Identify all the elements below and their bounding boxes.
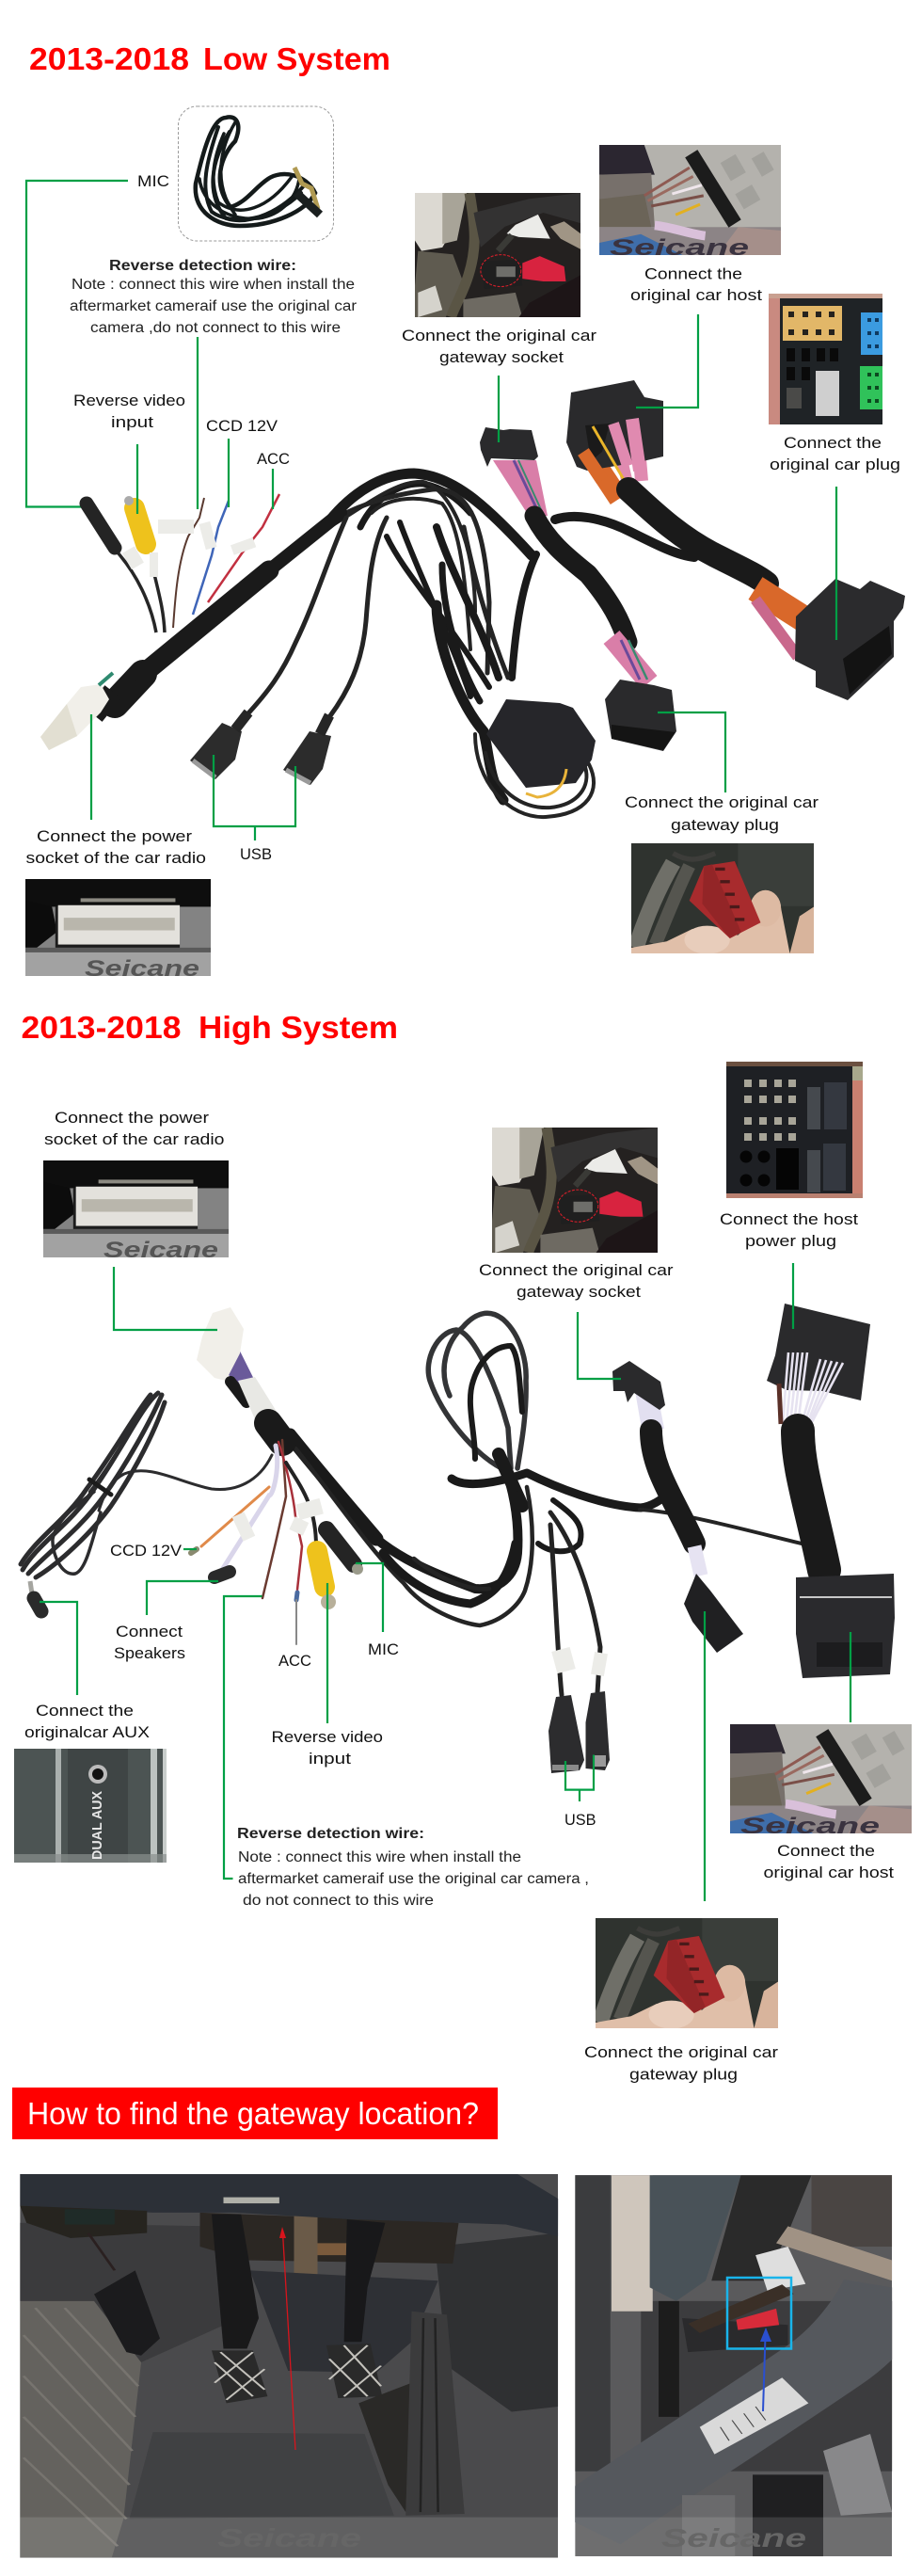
- text block: reverse detection wire note: aftermarket cameraif use the original car: [70, 298, 357, 314]
- heading: 2013-2018 High System: 2013-2018: [21, 1010, 181, 1045]
- label: gateway plug high: Connect the original car: [584, 2043, 778, 2061]
- text block: reverse detection note high: Note : connect this wire when install the: [238, 1849, 521, 1865]
- photo: AUX port: DUAL AUX: [89, 1791, 105, 1860]
- sub: gateway socket connector and wires: [480, 427, 628, 642]
- label: MIC: MIC: [137, 172, 169, 190]
- label: gateway socket: gateway socket: [439, 348, 564, 366]
- arrow: host power leader: [792, 1263, 794, 1329]
- sub: USB connectors: [190, 712, 331, 785]
- label: USB high: USB: [564, 1811, 596, 1829]
- sub: MIC jack: [87, 504, 115, 548]
- sub: label block and sleeve: [230, 1377, 282, 1442]
- heading: 2013-2018 High System: [21, 1010, 398, 1045]
- sub: big bundle to the lower right: [290, 1435, 533, 1625]
- label: ACC high: ACC: [278, 1652, 311, 1670]
- text block: reverse detection note high: aftermarket cameraif use the original car camera ,: [238, 1871, 589, 1887]
- sub: thick sleeve to car plug: [555, 489, 767, 584]
- photo: footwell with pedals: Seicane: [217, 2523, 361, 2552]
- heading: 2013-2018 Low System: Low System: [203, 41, 390, 76]
- arrow: plug leader: [835, 487, 837, 640]
- photo: original car host high: Seicane: [740, 1814, 880, 1839]
- sub: MIC jack: [326, 1529, 363, 1575]
- arrow: gateway plug leader high: [704, 1611, 706, 1901]
- arrow: host leader high: [850, 1632, 851, 1722]
- arrow: USB bracket high: [565, 1754, 594, 1801]
- photo: radio power socket high: Seicane: [103, 1238, 218, 1263]
- sub: wire labels: [122, 520, 256, 577]
- label: original car host high: Connect the: [777, 1842, 875, 1860]
- sub: yellow RCA plug: [317, 1551, 336, 1609]
- photo: radio power socket high: [43, 1160, 229, 1263]
- label: MIC high: MIC: [368, 1640, 399, 1658]
- label: original car host: Connect the: [644, 265, 742, 282]
- arrow: AUX leader: [40, 1602, 77, 1695]
- photo: gateway plug high: [596, 1918, 778, 2029]
- sub: horizontal sleeves: [452, 1473, 802, 1551]
- label: reverse video high: [271, 1728, 383, 1768]
- photo: gateway location close-up: [575, 2175, 894, 2556]
- sub: AUX jack: [30, 1581, 41, 1611]
- photo: radio power socket: Seicane: [85, 956, 199, 982]
- banner: how to find the gateway: [12, 2088, 498, 2139]
- sub: host connector and wires: [566, 380, 663, 499]
- arrow: MIC leader: [26, 181, 128, 506]
- label: connect speakers: Connect: [116, 1623, 183, 1640]
- arrow: reverse wire leader high: [224, 1596, 262, 1879]
- sub: wire labels: [232, 1498, 324, 1542]
- label: original car host high: [764, 1842, 894, 1881]
- photo: gateway socket: [415, 193, 580, 317]
- sub: gateway sleeve and plug: [651, 1431, 743, 1653]
- label: CCD 12V high: CCD 12V: [110, 1542, 183, 1560]
- label: gateway socket: Connect the original car: [402, 327, 596, 344]
- label: host power plug: Connect the host: [720, 1210, 858, 1228]
- sub: USB cables: [246, 518, 387, 717]
- text block: reverse detection wire note: [70, 258, 357, 336]
- sub: small signal wires: [118, 494, 279, 632]
- label: radio power socket: Connect the power: [37, 827, 192, 845]
- photo: footwell with pedals: [20, 2174, 559, 2558]
- arrow: USB bracket: [214, 755, 295, 840]
- sub: white radio connector: [197, 1307, 249, 1393]
- label: original car plug: Connect the: [784, 434, 882, 452]
- arrow: blue arrow to gateway: [760, 2328, 771, 2411]
- label: gateway socket high: gateway socket: [517, 1283, 641, 1301]
- label: gateway plug high: gateway plug: [629, 2066, 738, 2084]
- sub: host power connector: [767, 1304, 870, 1424]
- sub: gateway plug connector: [605, 637, 676, 751]
- sub: AUX cable bundle: [21, 1393, 272, 1577]
- text block: reverse detection wire note: camera ,do not connect to this wire: [90, 320, 341, 336]
- photo: original car host: [599, 145, 781, 261]
- sub: CCD, speaker and signal wires: [191, 1440, 316, 1644]
- label: radio power socket high: Connect the power: [55, 1109, 209, 1127]
- photo: gateway plug: [631, 843, 814, 954]
- heading: 2013-2018 Low System: 2013-2018: [29, 41, 189, 76]
- arrow: CCD leader: [228, 439, 230, 507]
- label: USB: USB: [240, 845, 272, 863]
- label: reverse video input: input: [111, 413, 153, 431]
- label: radio power socket high: socket of the car radio: [44, 1130, 224, 1148]
- photo: original car host: Seicane: [610, 235, 749, 261]
- label: original car host: [630, 265, 762, 304]
- arrow: reverse video leader high: [326, 1583, 328, 1723]
- label: radio power socket high: [44, 1109, 224, 1148]
- label: original car AUX: [24, 1702, 150, 1741]
- sub: yellow RCA: [124, 496, 146, 544]
- label: original car host: original car host: [630, 286, 762, 304]
- panel: MIC cable photo: [179, 106, 333, 241]
- photo: host power plug: [726, 1062, 863, 1198]
- label: reverse video input: [73, 392, 185, 431]
- photo: original car plug: [769, 294, 882, 424]
- label: gateway socket: [402, 327, 596, 366]
- photo: original car host high: [730, 1724, 912, 1839]
- sub: white radio power connector: [40, 673, 113, 750]
- arrow: CCD leader high: [183, 1548, 197, 1550]
- label: radio power socket: socket of the car radio: [26, 849, 206, 867]
- sub: long braided cables: [315, 473, 594, 817]
- arrow: gateway plug leader: [658, 712, 725, 792]
- text block: reverse detection note high: do not connect to this wire: [243, 1893, 434, 1909]
- heading: 2013-2018 Low System: [29, 41, 390, 76]
- label: gateway plug: [625, 793, 819, 834]
- arrow: speakers leader: [147, 1581, 218, 1615]
- label: original car AUX: originalcar AUX: [24, 1723, 150, 1741]
- label: host power plug: [720, 1210, 858, 1250]
- label: reverse video input: Reverse video: [73, 392, 185, 409]
- label: gateway plug: gateway plug: [671, 816, 779, 834]
- sub: USB cables and connectors: [548, 1512, 610, 1773]
- arrow: reverse video leader: [136, 444, 138, 514]
- sub: gateway socket connector: [612, 1361, 665, 1429]
- label: radio power socket: [26, 827, 206, 867]
- arrow: red arrow in footwell: [279, 2227, 295, 2450]
- arrow: ACC leader: [272, 469, 274, 509]
- heading: 2013-2018 High System: High System: [199, 1010, 398, 1045]
- label: original car plug: [770, 434, 900, 473]
- chart: low system wiring harness: [40, 380, 905, 817]
- label: reverse video high: Reverse video: [271, 1728, 383, 1746]
- sub: upper cable loops: [428, 1313, 526, 1506]
- label: reverse video high: input: [309, 1750, 351, 1768]
- label: gateway plug: Connect the original car: [625, 793, 819, 811]
- arrow: MIC leader high: [356, 1563, 383, 1632]
- banner: how to find the gateway: How to find the gateway location?: [27, 2096, 479, 2131]
- label: gateway plug high: [584, 2043, 778, 2084]
- chart: high system wiring harness: [21, 1304, 895, 1773]
- arrow: host leader: [636, 314, 698, 408]
- label: original car AUX: Connect the: [36, 1702, 134, 1720]
- label: original car host high: original car host: [764, 1864, 894, 1881]
- text block: reverse detection note high: [237, 1826, 589, 1909]
- label: ACC: ACC: [257, 450, 290, 468]
- photo: radio power socket: [25, 879, 211, 982]
- label: CCD 12V: CCD 12V: [206, 417, 278, 435]
- label: connect speakers: Speakers: [114, 1644, 185, 1662]
- arrow: power leader: [90, 714, 92, 820]
- sub: car plug connector: [755, 579, 905, 700]
- text block: reverse detection wire note: Reverse detection wire:: [109, 258, 296, 274]
- sub: main sleeve to radio plug: [115, 513, 341, 704]
- sub: black box connector: [486, 699, 596, 797]
- label: original car plug: original car plug: [770, 456, 900, 473]
- text block: reverse detection note high: Reverse detection wire:: [237, 1826, 424, 1842]
- arrow: reverse wire leader: [197, 337, 199, 509]
- photo: gateway socket high: [492, 1128, 658, 1253]
- label: connect speakers: [114, 1623, 185, 1662]
- photo: AUX port: [14, 1749, 167, 1863]
- sub: host sleeve and connector: [796, 1431, 895, 1678]
- text block: reverse detection wire note: Note : connect this wire when install the: [72, 277, 355, 293]
- arrow: gateway socket leader: [498, 376, 500, 442]
- label: gateway socket high: Connect the original car: [479, 1261, 674, 1279]
- photo: gateway location close-up: Seicane: [661, 2523, 806, 2552]
- callout: cyan highlight box: [727, 2278, 791, 2349]
- label: host power plug: power plug: [745, 1232, 836, 1250]
- arrow: gateway socket leader high: [578, 1312, 621, 1379]
- label: gateway socket high: [479, 1261, 674, 1301]
- arrow: power leader high: [114, 1267, 217, 1330]
